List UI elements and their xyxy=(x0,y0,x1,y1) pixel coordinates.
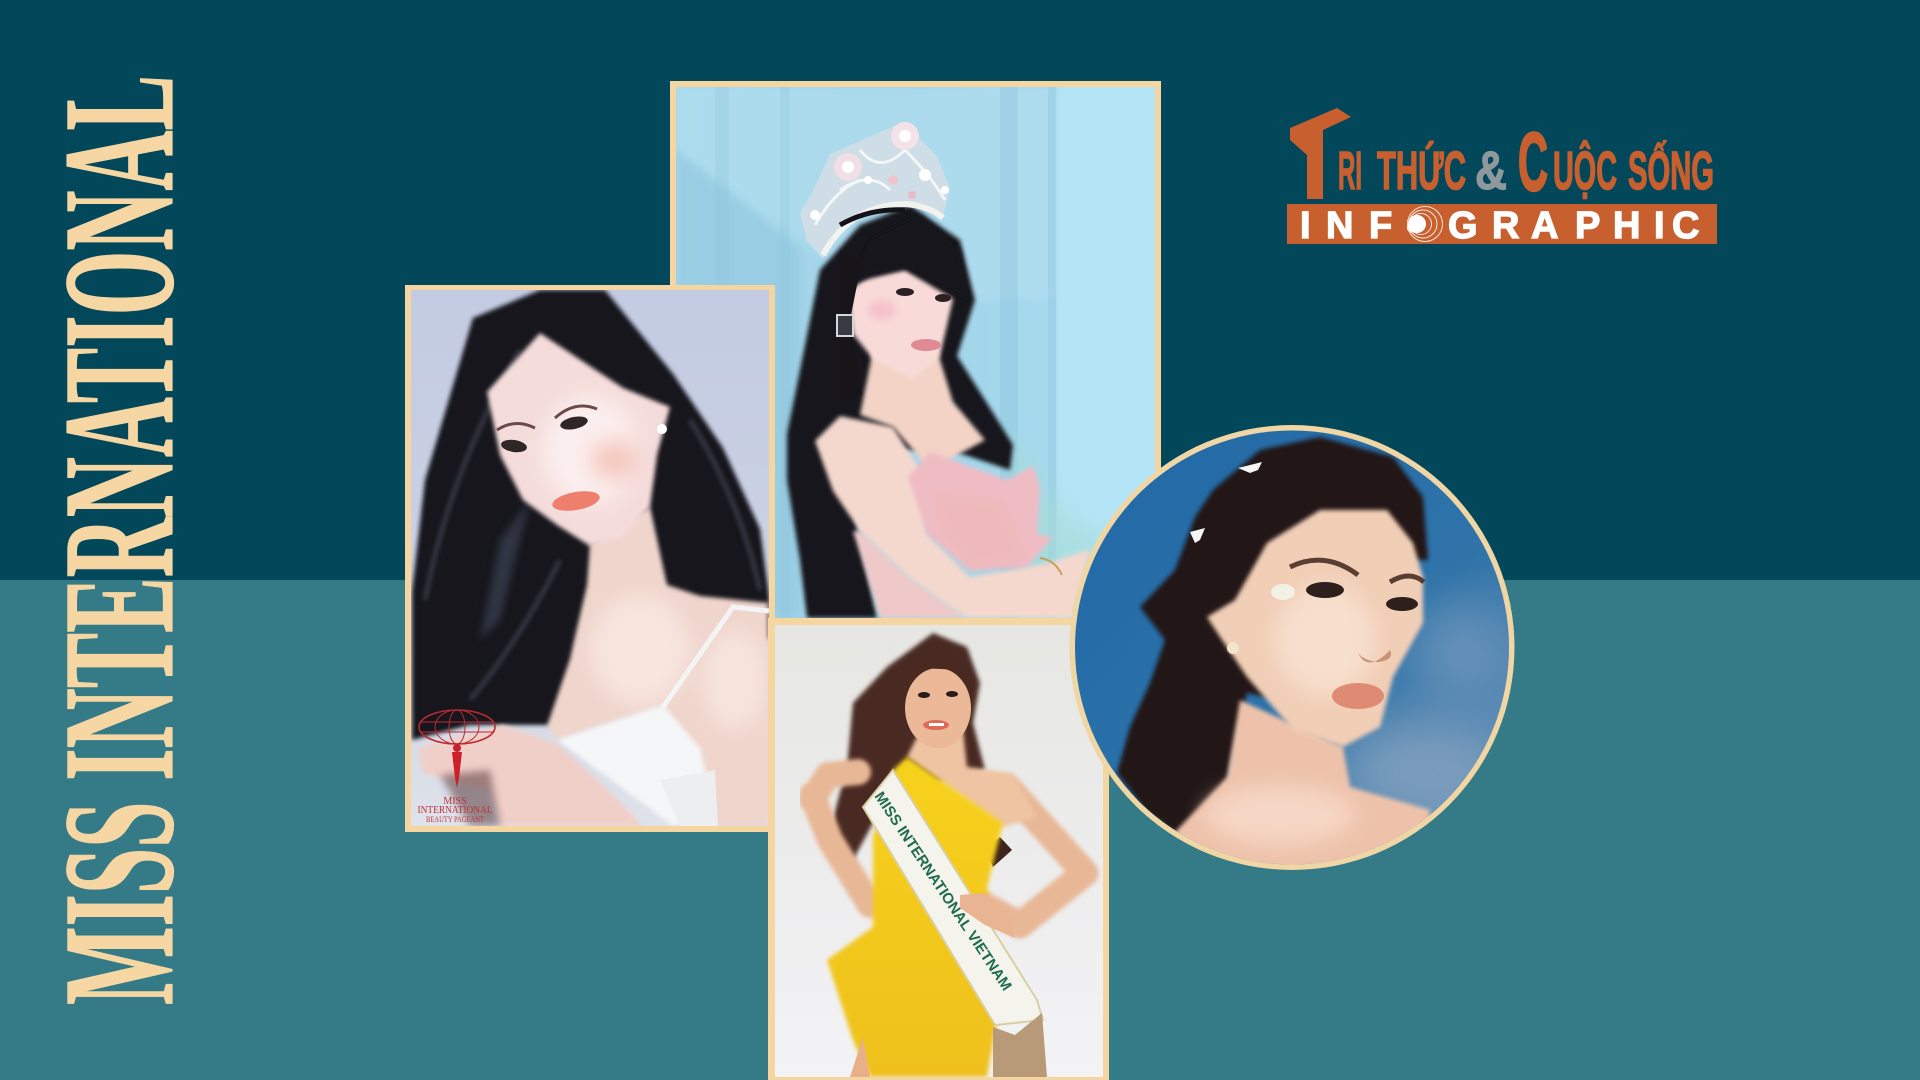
neck and shoulder xyxy=(907,730,1037,827)
background: lower teal band xyxy=(0,580,1920,1080)
dress xyxy=(827,757,1003,1077)
chest xyxy=(547,507,769,826)
face xyxy=(487,333,670,546)
logo: wordmark: C xyxy=(1518,115,1548,208)
sash tassel xyxy=(993,1013,1047,1077)
sash text: MISS INTERNATIONAL VIETNAM xyxy=(871,789,1015,994)
facial features xyxy=(555,406,597,418)
logo: ring emblem xyxy=(1408,206,1442,242)
pageant logo: INTERNATIONAL xyxy=(418,804,493,816)
pageant logo: BEAUTY PAGEANT xyxy=(426,815,484,824)
logo: wordmark xyxy=(1338,115,1714,208)
panel: photo bottom, woman in yellow dress with sash xyxy=(768,618,1109,1080)
crown xyxy=(800,122,950,259)
logo: wordmark: UỘC xyxy=(1553,140,1617,201)
pageant logo: MISS xyxy=(443,796,467,807)
white top xyxy=(557,705,715,826)
neck and chest xyxy=(1174,698,1432,864)
face xyxy=(905,668,971,748)
face xyxy=(847,270,953,379)
logo: Tri Thuc & Cuoc Song Infographic xyxy=(1287,108,1717,247)
hair xyxy=(1117,437,1428,835)
panel: photo left, dark-haired woman in white xyxy=(405,285,775,832)
panel: photo top, crowned woman on blue curtain xyxy=(670,81,1161,625)
logo: infographic lettering: INF xyxy=(1300,205,1392,247)
ornaments xyxy=(1271,584,1295,600)
logo: wordmark: & xyxy=(1475,141,1507,201)
dress xyxy=(908,452,1053,570)
logo: wordmark: THỨC xyxy=(1377,141,1466,201)
neck xyxy=(860,350,985,470)
logo: wordmark: RI xyxy=(1338,141,1362,201)
facial features xyxy=(1290,560,1358,575)
hand on hip xyxy=(960,893,1015,938)
logo: infographic lettering: GRAPHIC xyxy=(1448,205,1699,247)
hair xyxy=(827,633,985,860)
background: upper dark teal band xyxy=(0,0,1920,580)
right arm xyxy=(975,790,1085,925)
logo: orange bar xyxy=(1287,204,1717,244)
shoulder and arm xyxy=(815,416,1090,618)
hair xyxy=(787,205,1013,618)
sash xyxy=(863,770,1043,1025)
facial features xyxy=(896,288,914,296)
skirt xyxy=(853,531,967,618)
logo: infographic lettering: O xyxy=(1407,219,1418,235)
strap xyxy=(663,607,769,707)
logo: T mark xyxy=(1290,108,1351,199)
bangs xyxy=(856,213,966,290)
logo: wordmark: SỐNG xyxy=(1628,141,1714,201)
face xyxy=(1207,510,1423,747)
hands xyxy=(418,725,643,826)
panel: photo right, circular portrait on blue sky xyxy=(1070,425,1514,880)
hair xyxy=(412,290,769,740)
left arm xyxy=(812,772,870,905)
pageant logo xyxy=(418,710,495,824)
